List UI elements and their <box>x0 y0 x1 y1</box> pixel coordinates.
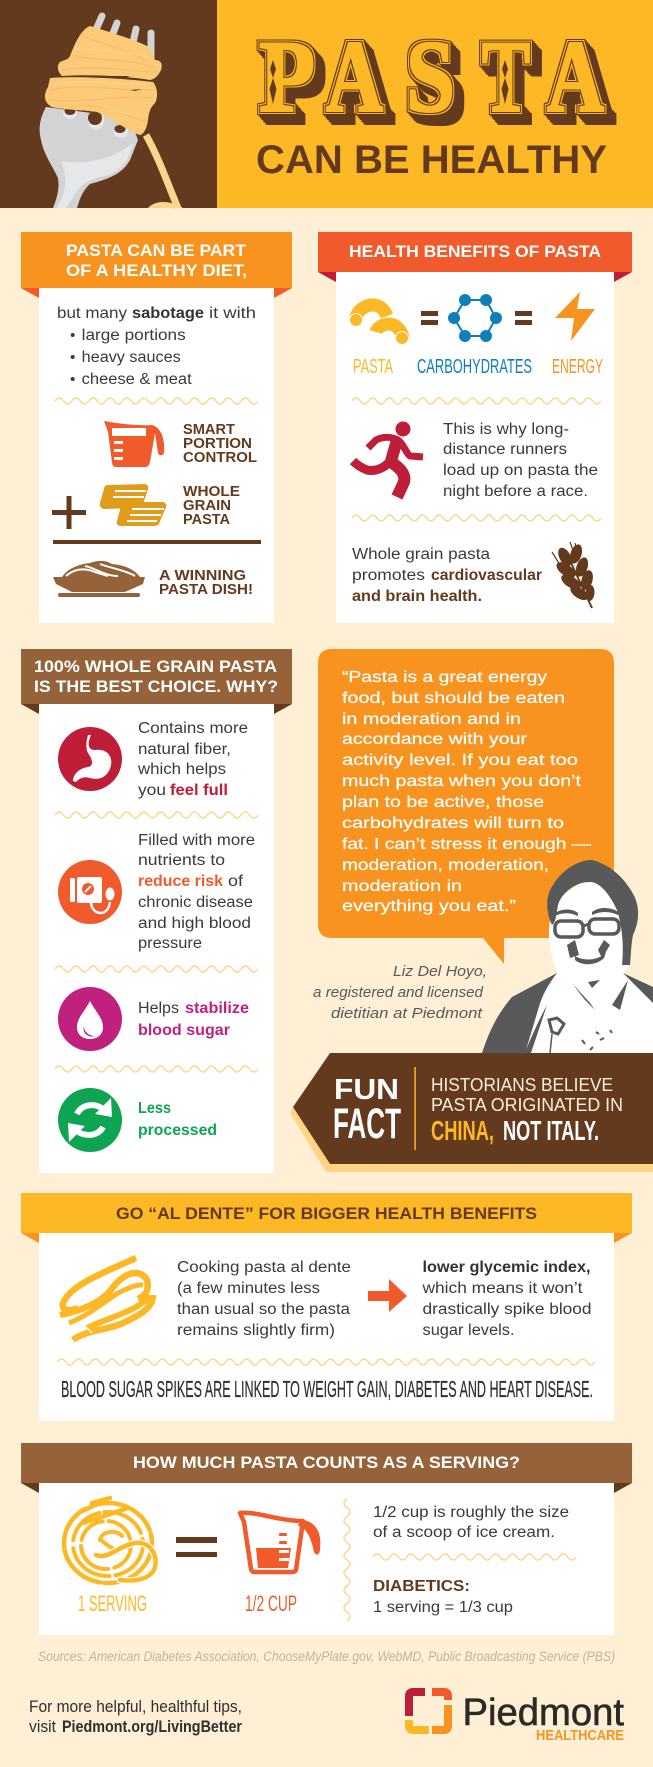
label: smart portion control: SMART <box>183 422 235 438</box>
panel: health benefits of pasta <box>318 232 632 623</box>
text: cooking al dente: than usual so the pasta <box>177 1301 350 1318</box>
text: less processed: processed <box>138 1122 217 1139</box>
text: long-distance runners <box>443 421 598 500</box>
text: lower glycemic index: sugar levels. <box>422 1322 514 1339</box>
text: cooking al dente <box>177 1259 351 1339</box>
text: natural fiber: natural fiber, <box>138 741 231 758</box>
attribution: Liz Del Hoyo: dietitian at Piedmont <box>331 1005 483 1022</box>
text: whole grain pasta promotes <box>352 546 542 605</box>
subtitle: can be healthy: CAN BE HEALTHY <box>256 138 607 182</box>
panel: pasta can be part of a healthy diet <box>21 232 292 623</box>
icon: runner <box>353 422 423 497</box>
icon: carbohydrate molecule <box>448 294 502 342</box>
icon: fork twirling pasta <box>40 16 183 208</box>
icon: wheat <box>552 542 595 608</box>
callout: fun fact <box>290 1053 653 1172</box>
text: more nutrients <box>138 832 255 952</box>
intro text and list: but many <box>57 305 127 322</box>
text: more nutrients: nutrients to <box>138 852 225 869</box>
quote text: carbohydrates will turn to <box>342 815 564 832</box>
labels: pasta carbohydrates energy: PASTA <box>353 356 393 378</box>
text: long-distance runners: night before a race. <box>443 483 588 500</box>
text: more nutrients: of <box>228 873 244 890</box>
label: whole grain pasta: WHOLE <box>183 484 240 500</box>
quote text: food, but should be eaten <box>342 690 565 707</box>
text: lower glycemic index: lower glycemic index, <box>422 1259 590 1276</box>
icon: pasta serving nest <box>64 1498 156 1583</box>
labels: serving and cup <box>78 1591 297 1616</box>
footer text: visit <box>29 1718 56 1736</box>
title: PASTA: T <box>482 20 530 134</box>
text: long-distance runners: distance runners <box>443 441 567 458</box>
footer text: For more helpful, healthful tips, <box>29 1698 242 1716</box>
text: cooking al dente: (a few minutes less <box>177 1280 320 1297</box>
icon: lightning bolt <box>555 292 595 341</box>
label: a winning pasta dish: A WINNING <box>159 568 246 584</box>
heading: OF A HEALTHY DIET, <box>66 262 247 280</box>
intro text and list <box>57 305 256 388</box>
text: pasta origin: HISTORIANS BELIEVE <box>431 1075 613 1095</box>
text: less processed <box>138 1100 217 1139</box>
text: lower glycemic index <box>421 1259 592 1339</box>
label: fun fact: FACT <box>333 1100 401 1148</box>
intro text and list: heavy sauces <box>82 349 181 366</box>
icon: blood pressure cuff <box>58 860 122 924</box>
icon: half full measuring cup <box>240 1513 320 1572</box>
text: stabilize blood sugar: stabilize <box>185 1000 249 1017</box>
text: pasta origin: NOT ITALY. <box>503 1115 599 1146</box>
text: stabilize blood sugar: Helps <box>138 1000 179 1017</box>
logo: Piedmont Healthcare: HEALTHCARE <box>536 1728 624 1744</box>
title: PASTA: S <box>406 20 455 134</box>
text: natural fiber: which helps <box>137 761 226 778</box>
text: less processed: Less <box>138 1100 171 1117</box>
text: scoop of ice cream <box>373 1504 569 1541</box>
label: smart portion control: CONTROL <box>183 450 257 466</box>
panel: how much pasta counts as a serving <box>21 1443 632 1635</box>
text: diabetics <box>373 1578 513 1616</box>
text: natural fiber: Contains more <box>138 720 248 737</box>
text: more nutrients: Filled with more <box>138 832 255 849</box>
icon: al dente noodles <box>60 1258 153 1340</box>
quote text: fat. I can’t stress it enough — <box>342 836 592 853</box>
labels: serving and cup: 1/2 CUP <box>245 1591 297 1616</box>
label: whole grain pasta: GRAIN <box>183 498 231 514</box>
panel: whole grain pasta is the best choice <box>21 649 292 1173</box>
text: long-distance runners: load up on pasta the <box>443 462 598 479</box>
heading: HOW MUCH PASTA COUNTS AS A SERVING? <box>133 1454 520 1472</box>
icon: recycle arrows <box>58 1088 122 1152</box>
label: fun fact: FUN <box>334 1074 399 1106</box>
text: lower glycemic index: which means it won’t <box>421 1280 583 1297</box>
icon: pasta dish <box>53 561 145 597</box>
text: cooking al dente: remains slightly firm) <box>177 1322 335 1339</box>
title: PASTA: A <box>326 20 383 134</box>
attribution: Liz Del Hoyo <box>313 963 487 1022</box>
text: diabetics: DIABETICS: <box>373 1578 470 1595</box>
quote text: in moderation and in <box>342 711 521 728</box>
label: smart portion control <box>183 422 257 466</box>
intro text and list: large portions <box>82 327 186 344</box>
text: more nutrients: and high blood <box>138 915 251 932</box>
text: long-distance runners: This is why long- <box>443 421 569 438</box>
text: whole grain pasta promotes: promotes <box>352 567 425 584</box>
text: pasta origin: PASTA ORIGINATED IN <box>431 1095 623 1115</box>
labels: serving and cup: 1 SERVING <box>78 1591 147 1616</box>
intro text and list: cheese & meat <box>82 371 192 388</box>
intro text and list: it with <box>209 305 256 322</box>
icon: logo bracket square <box>409 1692 448 1730</box>
text: scoop of ice cream: of a scoop of ice cream. <box>373 1524 555 1541</box>
heading: 100% WHOLE GRAIN PASTA <box>34 658 277 676</box>
heading <box>34 658 278 696</box>
quote text: “Pasta is a great energy <box>342 669 547 686</box>
text: more nutrients: chronic disease <box>138 894 253 911</box>
text: more nutrients: reduce risk <box>138 873 223 890</box>
icon: plus sign <box>52 496 86 529</box>
text: scoop of ice cream: 1/2 cup is roughly the size <box>373 1504 569 1521</box>
text: whole grain pasta promotes: Whole grain pasta <box>352 546 490 563</box>
label: fun fact <box>333 1074 401 1148</box>
footer text: Piedmont.org/LivingBetter <box>62 1718 242 1736</box>
label: a winning pasta dish <box>159 568 253 598</box>
text: natural fiber: feel full <box>170 782 228 799</box>
portrait: dietitian <box>482 860 653 1053</box>
icon: equals sign <box>176 1537 217 1557</box>
text: diabetics: 1 serving = 1/3 cup <box>373 1599 513 1616</box>
label: a winning pasta dish: PASTA DISH! <box>159 582 253 598</box>
text: stabilize blood sugar <box>138 1000 249 1039</box>
icon: equals sign <box>421 311 438 325</box>
header banner <box>0 0 653 208</box>
quote text: everything you eat.” <box>342 898 516 915</box>
quote text: plan to be active, those <box>342 794 544 811</box>
text: natural fiber: you <box>138 782 166 799</box>
icon: macaroni <box>350 305 408 344</box>
quote text <box>342 669 592 915</box>
text: lower glycemic index: drastically spike blood <box>422 1301 592 1318</box>
text: whole grain pasta promotes: cardiovascular <box>431 567 542 584</box>
attribution: Liz Del Hoyo: a registered and licensed <box>313 984 484 1001</box>
footer text <box>29 1698 242 1736</box>
label: whole grain pasta: PASTA <box>183 512 231 528</box>
text: natural fiber <box>137 720 248 799</box>
icon: measuring cup <box>104 421 164 467</box>
icon: equals sign <box>515 311 532 325</box>
quote text: moderation in <box>342 878 462 895</box>
quote text: much pasta when you don’t <box>342 773 582 790</box>
logo: Piedmont Healthcare: Piedmont <box>462 1692 624 1734</box>
labels: pasta carbohydrates energy: ENERGY <box>552 356 603 378</box>
icon: stomach <box>58 727 122 791</box>
text: whole grain pasta promotes: and brain health. <box>352 588 482 605</box>
labels: pasta carbohydrates energy: CARBOHYDRATES <box>417 356 532 378</box>
panel: al dente <box>21 1193 632 1421</box>
logo: Piedmont Healthcare <box>409 1692 624 1744</box>
heading: HEALTH BENEFITS OF PASTA <box>349 243 601 261</box>
attribution: Liz Del Hoyo: Liz Del Hoyo, <box>393 963 487 980</box>
icon: whole grain pasta <box>101 485 165 525</box>
icon: blood drop <box>58 987 122 1051</box>
arrow <box>368 1279 407 1312</box>
quote text: accordance with your <box>342 731 527 748</box>
intro text and list: sabotage <box>132 305 204 322</box>
title: PASTA <box>259 20 604 134</box>
callout: dietitian quote <box>318 649 614 964</box>
title: PASTA: A <box>547 20 604 134</box>
label: whole grain pasta <box>183 484 240 528</box>
heading: GO “AL DENTE” FOR BIGGER HEALTH BENEFITS <box>116 1205 537 1223</box>
heading: IS THE BEST CHOICE. WHY? <box>34 678 278 696</box>
label: smart portion control: PORTION <box>183 436 252 452</box>
text: more nutrients: pressure <box>138 935 202 952</box>
title: PASTA: P <box>259 20 315 134</box>
quote text: moderation, moderation, <box>342 857 549 874</box>
text: stabilize blood sugar: blood sugar <box>138 1022 230 1039</box>
heading: PASTA CAN BE PART <box>66 242 246 260</box>
text: pasta origin: CHINA, <box>431 1115 494 1146</box>
heading <box>66 242 247 280</box>
text: pasta origin <box>431 1075 623 1146</box>
quote text: activity level. If you eat too <box>342 752 578 769</box>
text: cooking al dente: Cooking pasta al dente <box>177 1259 351 1276</box>
